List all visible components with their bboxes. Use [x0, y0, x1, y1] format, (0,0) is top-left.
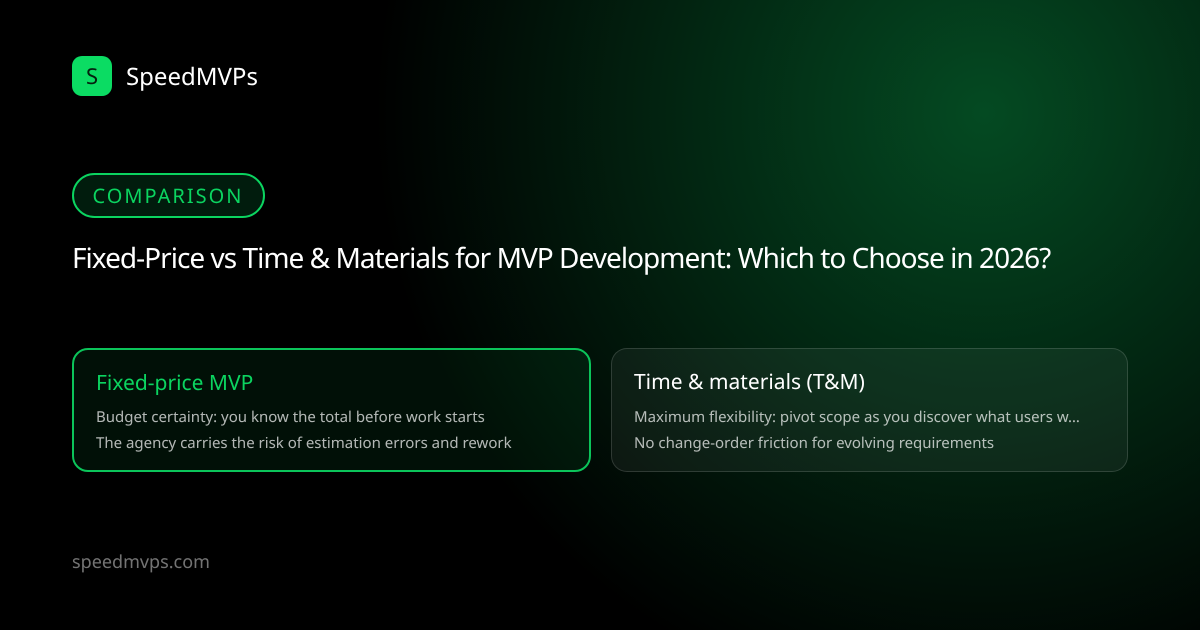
footer domain: speedmvps.com: [72, 550, 210, 574]
logo icon: [72, 56, 112, 96]
panel heading: Fixed-price MVP: [96, 369, 253, 397]
panel: fixed-price MVP: [72, 348, 591, 472]
category badge: COMPARISON: [93, 182, 243, 209]
point: budget certainty: Budget certainty: you know the total before work starts: [96, 407, 485, 427]
point: flexibility: Maximum flexibility: pivot scope as you discover what users w…: [634, 407, 1080, 427]
title: Fixed-Price vs Time & Materials for MVP Development: Which to Choose in 2026?: [72, 239, 1050, 277]
point: agency risk: The agency carries the risk of estimation errors and rework: [96, 433, 512, 453]
logo icon: S: [86, 61, 98, 91]
point: change orders: No change-order friction for evolving requirements: [634, 433, 994, 453]
category badge: [72, 173, 265, 218]
brand name: SpeedMVPs: [126, 60, 258, 93]
panel: time and materials: [611, 348, 1128, 472]
panel heading: Time & materials (T&M): [634, 368, 865, 396]
